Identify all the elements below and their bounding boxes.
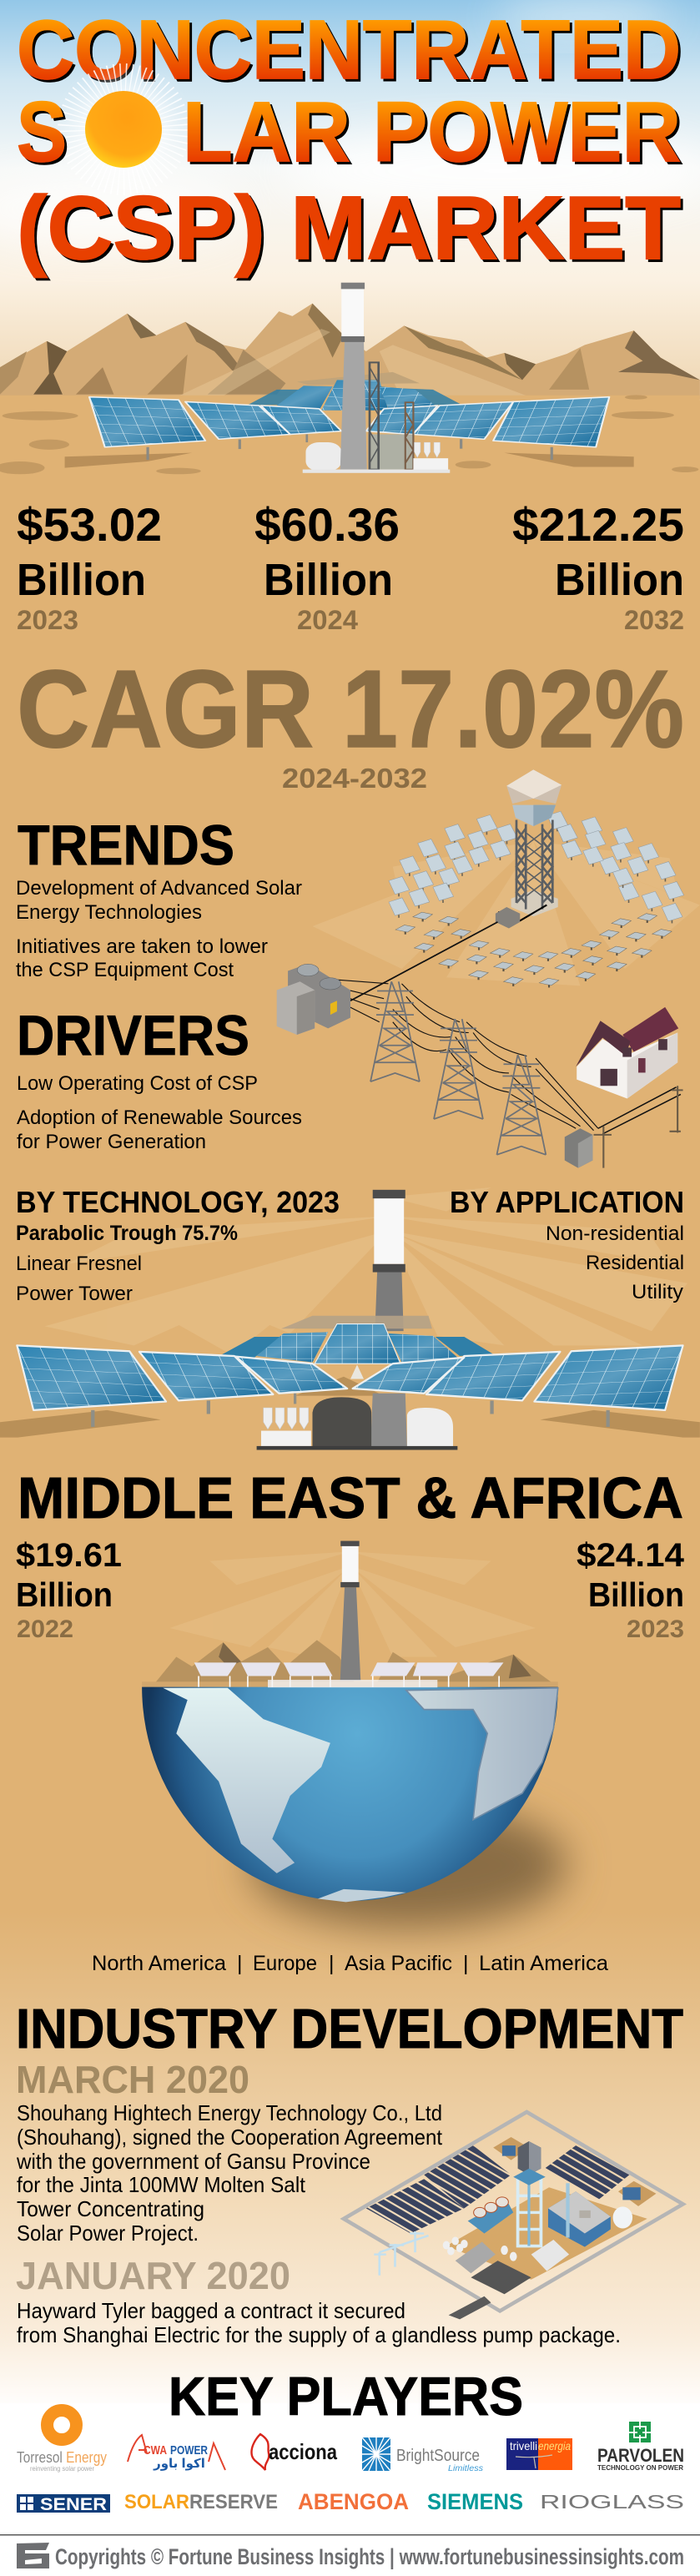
logo: ACWA Power: CWA [144,2443,167,2458]
logo: Trivelli Energia: trivelli [510,2439,537,2452]
regional value 2022: Billion [16,1575,113,1614]
globe [142,1687,558,1902]
heading: trends: Development of Advanced Solar [16,877,302,900]
heading: trends: Energy Technologies [16,901,202,924]
development: March 2020: Shouhang Hightech Energy Technology Co., Ltd [17,2100,442,2125]
regional value 2022: 2022 [17,1616,73,1643]
regional value 2022 [16,1537,122,1643]
logo: Acciona: acciona [269,2439,337,2464]
other regions list: Asia Pacific [345,1952,452,1975]
solar panels [17,1324,683,1427]
illustration: segmentation tower with solar mirrors [0,1187,700,1450]
development: March 2020: with the government of Gansu Province [16,2149,370,2174]
development: January 2020 [16,2254,621,2347]
logo: ACWA Power: اكوا باور [153,2457,205,2471]
light rays [44,1187,687,1355]
plant fence and ground [344,2112,683,2311]
transformer yards [493,2137,656,2206]
logo: SolarReserve: SOLARRESERVE [124,2491,278,2513]
other regions list: Europe [253,1952,317,1975]
heading: drivers [17,1004,302,1153]
market size 2032: $212.25 [512,498,684,551]
other regions list [92,1952,608,1975]
footer logo icon [17,2543,49,2568]
development: March 2020: Tower Concentrating [17,2196,204,2221]
development: March 2020 [16,2058,443,2246]
development: March 2020: for the Jinta 100MW Molten Salt [17,2172,306,2197]
heading: trends: TRENDS [18,814,234,877]
illustration: isometric solar plant [344,2112,683,2319]
panel: by application: Utility [632,1281,683,1303]
other regions list: North America [92,1952,226,1975]
transformer and utility poles [565,1086,683,1168]
title line 1: CONCENTRATED [17,3,681,97]
parking and access road [449,2261,531,2319]
panel: by application: Non-residential [546,1222,684,1245]
power lines [304,922,681,1134]
illustration: half globe with solar plant [142,1541,558,1902]
development: March 2020: Solar Power Project. [17,2221,199,2246]
regional value 2023: 2023 [627,1616,684,1643]
logo: Torresol Energy [17,2410,107,2473]
other regions list: | [237,1952,242,1975]
logo: ACWA Power: POWER [170,2443,208,2458]
logo: Sener [17,2494,110,2514]
heading: trends: the CSP Equipment Cost [16,959,234,981]
solar arrays [366,2145,629,2233]
title [17,3,681,278]
heading: drivers: for Power Generation [17,1131,206,1153]
panel: by application: BY APPLICATION [450,1185,684,1219]
other regions list: | [463,1952,469,1975]
heading: drivers: Adoption of Renewable Sources [17,1107,302,1129]
market size 2023: $53.02 [17,498,162,551]
heading: drivers: DRIVERS [17,1004,249,1067]
logo: ACWA Power [128,2435,225,2471]
title line 2: S [17,84,67,179]
logo: Acciona [251,2434,337,2470]
hero sky background [0,0,700,401]
development: March 2020: MARCH 2020 [16,2058,249,2101]
other regions list: Latin America [479,1952,608,1975]
panel: by application: Residential [586,1252,684,1274]
market size 2023: Billion [17,555,146,605]
market size 2032: 2032 [624,605,684,635]
solar panels [89,372,609,460]
panel: by technology: Power Tower [16,1283,133,1305]
heading: trends: Initiatives are taken to lower [16,935,268,958]
regional value 2023 [577,1537,685,1643]
logo: BrightSource: Limitless [448,2463,484,2473]
logo: Parvolen: TECHNOLOGY ON POWER [597,2463,683,2472]
market size 2023 [17,498,162,635]
regional value 2022: $19.61 [16,1537,122,1574]
CAGR figure: 2024-2032 [282,763,427,794]
panel: by application [450,1185,684,1303]
light rays [169,1551,536,1656]
turbine building [548,2183,632,2247]
logo: Torresol Energy: Torresol Energy [17,2449,107,2466]
regional value 2023: $24.14 [577,1537,685,1574]
panel: by technology: Linear Fresnel [16,1253,142,1275]
panel: by technology: BY TECHNOLOGY, 2023 [16,1185,340,1219]
market size 2032: Billion [555,555,684,605]
other regions list: | [329,1952,334,1975]
heading: Middle East and Africa: MIDDLE EAST & AFRICA [18,1465,683,1530]
hero illustration: desert, tower and solar panels [0,283,700,501]
development: January 2020: from Shanghai Electric for the supply of a glandless pump package. [17,2322,621,2347]
tower on the globe [340,1541,360,1681]
heading: trends [16,814,302,981]
desert ground [0,395,700,501]
mirrors on the globe [194,1662,503,1687]
development: January 2020: JANUARY 2020 [16,2254,290,2297]
central solar tower and plant [303,283,450,473]
market size 2024 [254,498,400,635]
illustration: heliostat field with central tower, pylons and house [277,769,700,1168]
panel: by technology [16,1185,340,1305]
title line 2 continued: LAR POWER [183,84,681,179]
development: March 2020: (Shouhang), signed the Cooperation Agreement [17,2125,443,2150]
sun icon replacing the letter O [72,78,175,181]
tower [281,1190,432,1331]
mountains [0,304,700,399]
pylons to plant [374,2231,429,2276]
tower [513,2141,546,2246]
logo: Trivelli Energia [506,2438,572,2470]
logo: Sener: SENER [40,2495,107,2514]
development: January 2020: Hayward Tyler bagged a contract it secured [17,2298,405,2323]
regional value 2023: Billion [588,1575,684,1614]
market size 2024: 2024 [297,605,358,635]
mountains on the globe [142,1640,558,1687]
power plant base [257,1394,457,1450]
logo: Parvolen [597,2422,684,2472]
market size 2023: 2023 [17,605,78,635]
market size 2024: Billion [264,555,393,605]
globe shadow [250,1802,567,1928]
ground shadows [0,1377,700,1438]
logo: BrightSource [362,2437,484,2473]
market size 2024: $60.36 [254,498,400,551]
house [576,1007,678,1099]
logo: Trivelli Energia: energia [538,2439,571,2452]
logo: Parvolen: PARVOLEN [597,2445,684,2466]
pylons [370,981,546,1155]
logo: Rioglass: RIOGLASS [540,2491,684,2513]
footer divider [0,2534,700,2535]
logo: Siemens: SIEMENS [427,2489,523,2514]
receiver tower [496,769,562,929]
title line 3: (CSP) MARKET [17,177,681,278]
heading: drivers: Low Operating Cost of CSP [17,1072,258,1095]
auxiliary units [443,2197,569,2273]
substation [277,964,350,1035]
light rays [312,841,700,986]
logo: Torresol Energy: reinventing solar power [30,2465,94,2473]
heading: key players: KEY PLAYERS [169,2366,523,2427]
logo: BrightSource: BrightSource [396,2447,480,2465]
panel: by technology: Parabolic Trough 75.7% [16,1222,238,1245]
heliostat field [389,811,684,987]
logo: Abengoa: ABENGOA [298,2489,409,2514]
market size 2032 [512,498,684,635]
